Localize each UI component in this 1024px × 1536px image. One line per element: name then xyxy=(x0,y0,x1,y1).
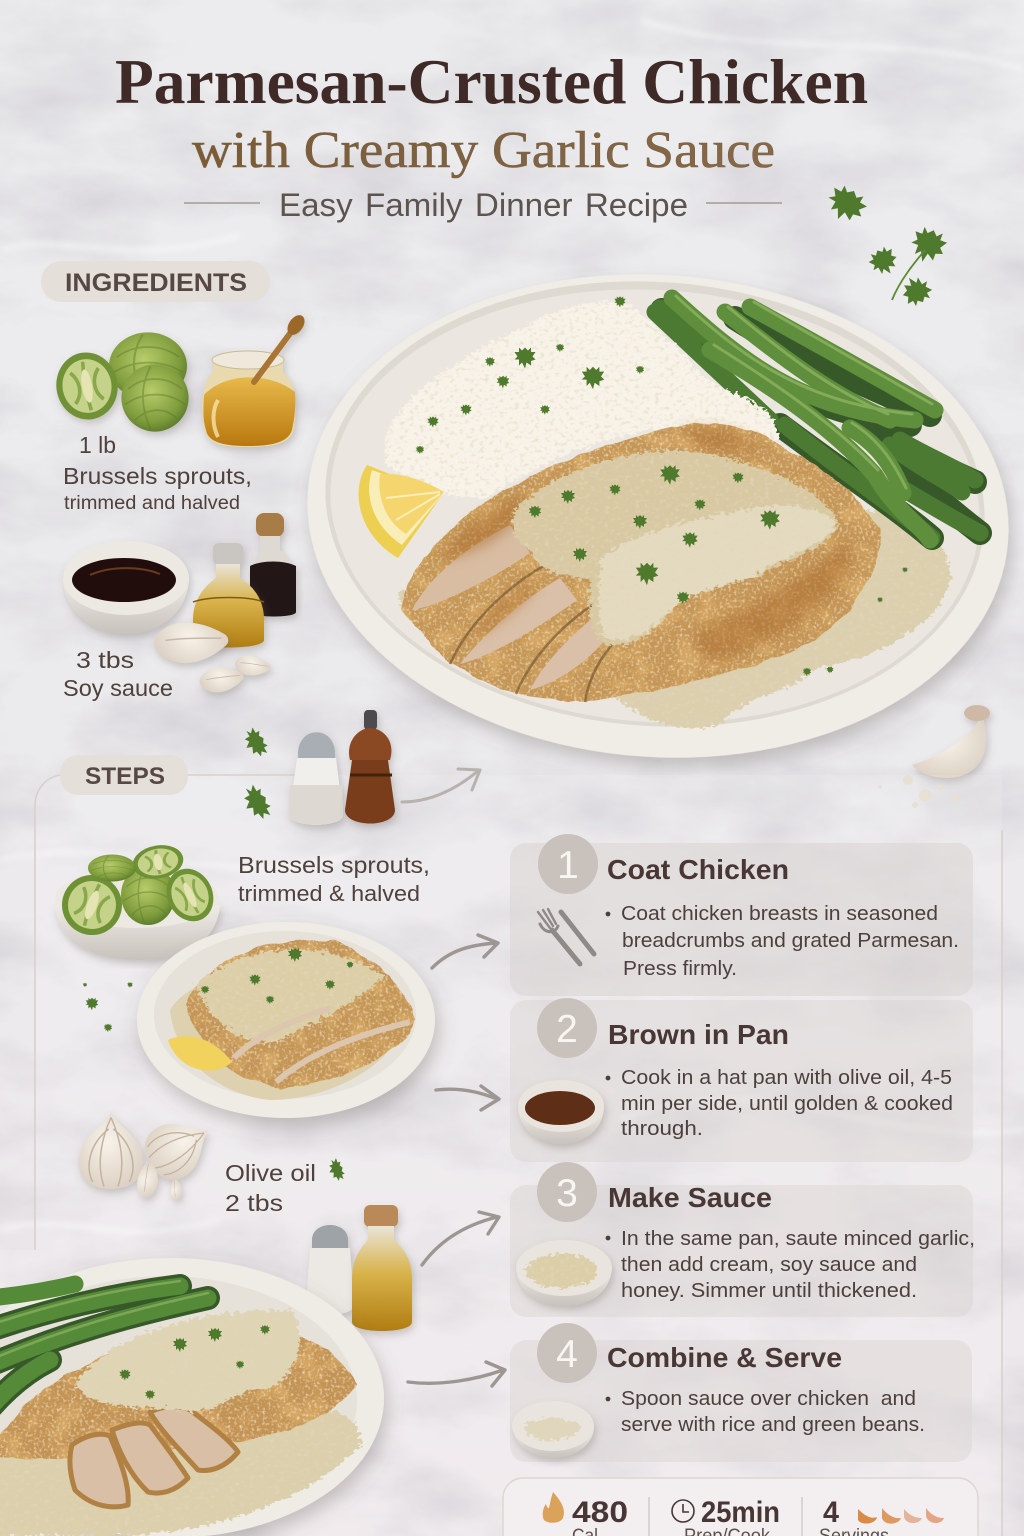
step number 1: 1 xyxy=(557,844,579,887)
step heading: Coat Chicken xyxy=(607,854,789,885)
icon: garlic cloves xyxy=(149,605,272,702)
sauce pool xyxy=(398,510,950,728)
icon: small parsley xyxy=(326,1157,346,1183)
green beans xyxy=(655,296,980,540)
icon: olive oil bottle small xyxy=(352,1205,412,1331)
illustration: plated sliced chicken xyxy=(137,922,435,1118)
icon: brussels sprouts xyxy=(51,332,189,432)
ingredient: brussels sprouts text xyxy=(63,432,252,514)
lemon wedge xyxy=(359,465,444,558)
heading: steps xyxy=(60,755,188,795)
icon: clock xyxy=(672,1500,694,1522)
panel: step 2 xyxy=(510,998,973,1162)
panel: step 3 xyxy=(510,1162,975,1317)
time: 25min xyxy=(701,1496,780,1529)
icon: garlic clove right xyxy=(912,705,990,778)
step text: serve with rice and green beans. xyxy=(621,1414,925,1436)
heading: steps: STEPS xyxy=(85,763,165,790)
cream sauce on chicken xyxy=(512,451,838,645)
arrow to step panel xyxy=(402,769,480,802)
subtitle: with Creamy Garlic Sauce xyxy=(192,122,775,179)
step number 2 xyxy=(537,998,597,1058)
step text xyxy=(606,1067,953,1140)
ingredient: soy sauce text xyxy=(63,647,173,701)
rice xyxy=(385,301,779,498)
step text: Press firmly. xyxy=(623,958,737,980)
step text: Coat chicken breasts in seasoned xyxy=(621,903,938,925)
heading: ingredients: INGREDIENTS xyxy=(65,269,247,297)
parsley garnish xyxy=(416,296,908,676)
icon: salt shaker small xyxy=(306,1225,354,1315)
icon: soy sauce bottle xyxy=(250,513,296,616)
icon: sauce dish xyxy=(512,1401,594,1458)
step number 2: 2 xyxy=(556,1008,578,1051)
text: brussels sprouts xyxy=(238,852,430,906)
step text: Cook in a hat pan with olive oil, 4-5 xyxy=(621,1067,952,1089)
illustration: garlic bulbs xyxy=(79,1106,223,1201)
text: brussels sprouts: Brussels sprouts, xyxy=(238,852,430,878)
icon: cream sauce bowl xyxy=(516,1240,612,1306)
servings xyxy=(819,1496,889,1536)
tagline with rules: Easy Family Dinner Recipe xyxy=(279,187,688,223)
step heading: Brown in Pan xyxy=(608,1019,789,1050)
step text: through. xyxy=(621,1118,703,1140)
arrow to step 3 xyxy=(422,1212,499,1265)
step number 3: 3 xyxy=(556,1172,578,1215)
icon: parsley sprigs by shakers xyxy=(238,725,274,824)
step text: breadcrumbs and grated Parmesan. xyxy=(622,930,959,952)
arrow to step 4 xyxy=(408,1362,505,1386)
illustration: bottom plate of chicken and beans xyxy=(0,1258,384,1536)
illustration: bowl of brussels sprouts xyxy=(54,841,222,960)
step text: min per side, until golden & cooked xyxy=(621,1093,953,1115)
step text xyxy=(606,1388,925,1436)
ingredient: soy sauce text: Soy sauce xyxy=(63,675,173,701)
step number 4 xyxy=(537,1323,597,1383)
icon: salt shaker xyxy=(289,732,343,825)
icon: honey jar with dipper xyxy=(202,312,308,447)
chicken breast and slices xyxy=(402,423,879,702)
step text: Spoon sauce over chicken and xyxy=(621,1388,916,1410)
plate xyxy=(291,251,1024,781)
text: brussels sprouts: trimmed & halved xyxy=(238,881,420,906)
icon: flame xyxy=(543,1492,564,1523)
text: olive oil: 2 tbs xyxy=(225,1190,283,1216)
ingredient: soy sauce text: 3 tbs xyxy=(76,647,134,673)
heading: ingredients xyxy=(41,261,270,302)
step text xyxy=(606,1228,975,1302)
time xyxy=(684,1496,780,1536)
step text xyxy=(606,903,959,980)
icon: fork and knife xyxy=(538,909,594,964)
text: olive oil xyxy=(225,1160,316,1216)
step text: honey. Simmer until thickened. xyxy=(621,1280,917,1302)
herbs scattered xyxy=(83,982,133,1032)
panel: step 1 xyxy=(510,834,973,996)
step text: then add cream, soy sauce and xyxy=(621,1254,917,1276)
icon: serving bowls xyxy=(858,1508,944,1524)
panel: nutrition stats xyxy=(503,1478,978,1536)
panel: steps frame xyxy=(0,775,1002,1536)
browned patches xyxy=(440,428,851,660)
crumbs xyxy=(878,775,959,808)
title: Parmesan-Crusted Chicken xyxy=(115,47,868,117)
icon: oil bottle xyxy=(193,543,264,648)
icon: parsley sprigs top right xyxy=(822,182,950,309)
step number 4: 4 xyxy=(556,1333,578,1376)
icon: soy sauce bowl xyxy=(63,541,189,634)
calories: 480 xyxy=(572,1496,628,1529)
ingredient: brussels sprouts text: Brussels sprouts, xyxy=(63,463,252,489)
icon: sauce bowl xyxy=(518,1080,604,1144)
text: olive oil: Olive oil xyxy=(225,1160,316,1186)
step text: In the same pan, saute minced garlic, xyxy=(621,1228,975,1250)
step number 3 xyxy=(537,1162,597,1222)
icon: pepper mill xyxy=(345,710,395,824)
step number 1 xyxy=(538,834,598,894)
hero plate with chicken, rice and green beans xyxy=(291,251,1024,781)
ingredient: brussels sprouts text: 1 lb xyxy=(79,432,116,458)
servings: 4 xyxy=(823,1496,839,1529)
arrows to step 1 and 2 xyxy=(432,935,499,1110)
step heading: Combine & Serve xyxy=(607,1342,842,1373)
step heading: Make Sauce xyxy=(608,1182,772,1213)
panel: step 4 xyxy=(510,1323,972,1462)
ingredient: brussels sprouts text: trimmed and halved xyxy=(64,493,240,514)
